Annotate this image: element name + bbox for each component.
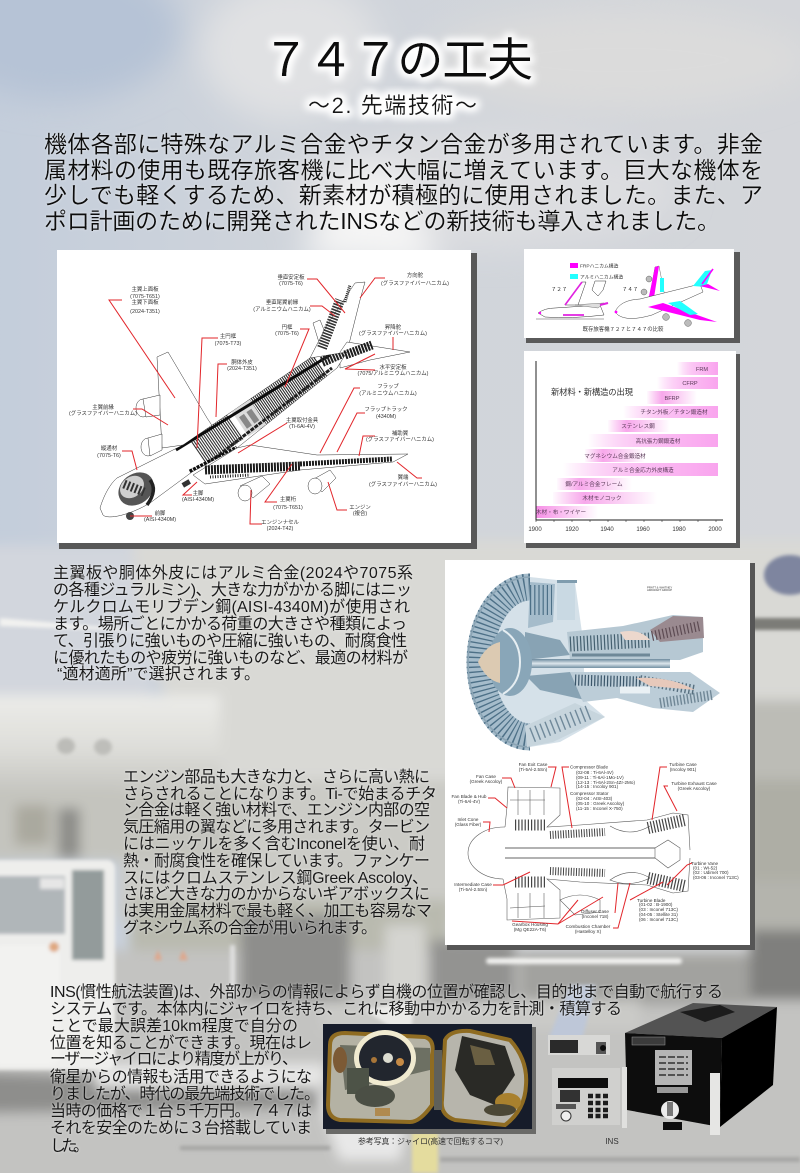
engine part labels: Diffuser Case (581, 909, 609, 914)
axes and year labels: 2000 (708, 527, 722, 533)
engine part labels: (Incoloy 901) (670, 767, 697, 772)
timeline bars: チタン外板／チタン鍛造材 (640, 408, 708, 416)
material callout labels: (グラスファイバーハニカム) (369, 480, 437, 488)
engine part labels: (02-04 : AISI-403) (576, 796, 613, 801)
engine part labels: Turbine Vane (691, 861, 719, 866)
paragraph: inertial navigation system (50, 983, 723, 1155)
axes and year labels: 1900 (528, 527, 542, 533)
material callout labels: 主翼取付金具 (286, 416, 319, 424)
engine part labels: Fan Case (476, 774, 496, 779)
timeline bars: FRM (696, 367, 708, 373)
photo: gyroscope reference picture (323, 1024, 536, 1134)
caption: INS photo: INS (605, 1137, 619, 1146)
material callout labels: (AISI-4340M) (144, 517, 176, 523)
engine part labels: (02 : Udimet 700) (693, 870, 729, 875)
fuselage interior structure (176, 352, 345, 472)
legend: アルミハニカム構造 (580, 274, 623, 280)
material callout labels: エンジン (349, 504, 371, 511)
material callout labels: 主翼下面板 (132, 298, 159, 306)
engine part labels: (05-10 : Greek Ascoloy) (576, 801, 625, 806)
engine part labels (452, 762, 739, 934)
left gyro housing (328, 1030, 433, 1122)
timeline bars: BFRP (665, 396, 680, 402)
engine part labels: Gearbox Housing (512, 922, 548, 927)
timeline bars: マグネシウム合金鍛造材 (584, 452, 646, 460)
material callout labels: 水平安定板 (380, 363, 407, 371)
axes and year labels: 1980 (672, 527, 686, 533)
material callout labels: 主翼桁 (280, 495, 297, 503)
material callout labels: 主円框 (220, 332, 237, 340)
paragraph: engine materials: にはニッケルを多く含むInconelを使い、耐 (123, 835, 425, 853)
timeline bars (536, 362, 718, 518)
material callout labels: (2024-T42) (267, 526, 294, 532)
panel: PW4000 turbofan cutaway and section (445, 560, 755, 950)
paragraph: inertial navigation system: りましたが、時代の最先端技術でした。 (50, 1085, 320, 1103)
material callout labels: 縦通材 (101, 444, 118, 452)
material callout labels: (グラスファイバーハニカム) (69, 409, 137, 417)
chart heading: 新材料・新構造の出現 (551, 387, 634, 397)
engine part labels: (Greek Ascoloy) (678, 786, 711, 791)
legend: FRPハニカム構造 (580, 262, 619, 270)
paragraph: engine materials (123, 768, 437, 937)
axes and year labels: 1960 (636, 527, 650, 533)
intro paragraph (44, 131, 763, 234)
engine part labels: (11-15 : Inconel X-750) (576, 806, 623, 811)
INS control display unit (552, 1068, 620, 1125)
engine part labels: (Ti-5Al-2.5Sn) (459, 887, 488, 892)
material callout labels: (2024-T351) (130, 309, 160, 315)
material callout labels: (4340M) (376, 414, 396, 420)
paragraph: inertial navigation system: ことで最大誤差10km程度で自分の (50, 1017, 298, 1035)
paragraph: engine materials: エンジン部品も大きな力と、さらに高い熱に (123, 768, 430, 786)
engine cross-section line drawing (468, 787, 690, 920)
paragraph: inertial navigation system: 衛星からの情報も活用できるようにな (50, 1068, 312, 1086)
material callout labels: (アルミニウムハニカム) (359, 389, 417, 397)
727 drawing (536, 281, 608, 319)
subtitle: ～2. 先端技術～ (308, 93, 477, 118)
material callout labels: (7075-T6) (97, 453, 121, 459)
engine part labels: (Mg QE22A-T6) (514, 927, 547, 932)
engine part labels: (09-11 : Ti-6Al-1Mo-1V) (576, 775, 624, 780)
material callout labels: (AISI-4340M) (182, 497, 214, 503)
747 drawing: ７４７ (622, 287, 638, 293)
cutaway airplane drawing (100, 282, 410, 520)
paragraph: inertial navigation system: ーザージャイロにより精度が上がり、 (50, 1050, 298, 1068)
material callout labels: (7075-T6) (275, 331, 299, 337)
engine part labels: (Ti-5Al-2.5Sn) (519, 767, 548, 772)
engine leader lines (483, 767, 692, 928)
engine part labels: (02-08 : Ti-6Al-4V) (576, 770, 614, 775)
material callout labels: 円框 (282, 323, 293, 331)
paragraph: alloys used in the airframe: に優れたものや疲労に強いものなど、最適の材料が (53, 649, 408, 667)
timeline bars: アルミ合金応力外皮構造 (612, 466, 674, 474)
paragraph: engine materials: さほど大きな力のかからないギアボックスに (123, 885, 430, 903)
paragraph: alloys used in the airframe: “適材適所”で選択されます。 (57, 665, 260, 683)
timeline bars: 木材モノコック (582, 494, 622, 502)
timeline bars: ステンレス鋼 (621, 422, 655, 430)
material callout labels: 前脚 (155, 509, 165, 517)
material callout labels: (グラスファイバーハニカム) (366, 435, 434, 443)
caption: gyro photo: 参考写真：ジャイロ(高速で回転するコマ) (358, 1136, 503, 1146)
title: ７４７の工夫 (263, 34, 533, 86)
material callout labels: 主脚 (193, 489, 203, 497)
material callout labels: 昇降舵 (385, 323, 402, 331)
engine part labels: (Greek Ascoloy) (470, 779, 503, 784)
callout leader lines (109, 278, 422, 524)
engine cutaway illustration: AIRCRAFT GROUP (647, 588, 672, 592)
paragraph: engine materials: さらされることになります。Ti-で始まるチタ (123, 785, 437, 803)
paragraph: engine materials: グネシウム系の合金が用いられます。 (123, 919, 377, 937)
engine cutaway illustration: PRATT & WHITNEY (647, 586, 672, 590)
engine part labels: (Ti-6Al-4V) (458, 799, 480, 804)
axes and year labels: 1920 (565, 527, 579, 533)
material callout labels: (7075/アルミニウムハニカム) (358, 369, 429, 377)
panel: new materials timeline chart (524, 351, 740, 548)
paragraph: alloys used in the airframe: ます。場所ごとにかかる荷重の大きさや種類によっ (53, 615, 407, 633)
INS hardware photo (548, 1003, 777, 1135)
engine part labels: Turbine Case (669, 762, 697, 767)
engine part labels: Turbine Blade (637, 898, 666, 903)
material callout labels: (7075-T73) (215, 341, 242, 347)
INS mode selector panel (548, 1035, 610, 1055)
paragraph: inertial navigation system: 当時の価格で１台５千万円。７４７は (50, 1102, 312, 1120)
paragraph: inertial navigation system: した。 (50, 1137, 89, 1155)
intro paragraph: 属材料の使用も既存旅客機に比べ大幅に増えています。巨大な機体を (44, 157, 763, 183)
engine part labels: (03-06 : Inconel 713C) (693, 875, 739, 880)
timeline bars: 鋼/アルミ合金フレーム (565, 480, 623, 488)
engine part labels: (01-02 : B-1900) (639, 902, 673, 907)
material callout labels: 胴体外皮 (231, 358, 253, 366)
timeline bars: 高抗張力鋼鍛造材 (636, 437, 681, 445)
legend (570, 262, 623, 280)
material callout labels: (7075-T6) (279, 281, 303, 287)
paragraph: alloys used in the airframe: 主翼板や胴体外皮にはアルミ合金(2024や7075系 (53, 564, 413, 582)
material callout labels (69, 271, 449, 532)
material callout labels: (2024-T351) (227, 366, 257, 372)
timeline bars: 木材・布・ワイヤー (536, 508, 586, 516)
intro paragraph: ポロ計画のために開発されたINSなどの新技術も導入されました。 (44, 208, 720, 234)
material callout labels: (7075-T651) (130, 294, 160, 300)
material callout labels: 翼端 (398, 473, 409, 481)
engine cutaway illustration (468, 577, 720, 747)
paragraph: engine materials: は実用金属材料で最も軽く、加工も容易なマ (123, 902, 432, 920)
engine part labels: (Hastelloy X) (575, 929, 602, 934)
material callout labels: (Ti-6Al-4V) (289, 424, 315, 430)
material callout labels: 垂直安定板 (278, 273, 305, 281)
engine part labels: (06 : Inconel 713C) (639, 917, 679, 922)
paragraph: engine materials: スにはクロムステンレス鋼Greek Ascoloy、 (123, 869, 428, 887)
timeline bars: CFRP (682, 381, 698, 387)
panel: 747 cutaway structure diagram (57, 250, 477, 549)
paragraph: alloys used in the airframe: て、引張りに強いものや圧縮に強いもの、耐腐食性 (53, 632, 407, 650)
engine part labels: Inlet Cone (458, 817, 479, 822)
engine part labels: Compressor Stator (570, 791, 609, 796)
747 drawing (615, 266, 720, 326)
material callout labels: 方向舵 (407, 271, 424, 279)
paragraph: alloys used in the airframe: ケルクロムモリブデン鋼(AISI-4340M)が使用され (53, 597, 410, 616)
material callout labels: (複合) (353, 509, 367, 517)
material callout labels: フラップ (377, 383, 399, 390)
paragraph: inertial navigation system: システムです。本体内にジャイロを持ち、これに移動中かかる力を計測・積算する (50, 999, 622, 1018)
engine part labels: (14-15 : Incoloy 901) (576, 784, 619, 789)
material callout labels: 主翼上面板 (132, 285, 159, 293)
material callout labels: (グラスファイバーハニカム) (381, 279, 449, 287)
material callout labels: 主翼前縁 (92, 403, 114, 411)
panel: 727 and 747 composite comparison (524, 249, 740, 343)
axes and year labels (528, 361, 723, 533)
material callout labels: (グラスファイバーハニカム) (359, 329, 427, 337)
engine part labels: (Inconel 718) (582, 914, 609, 919)
engine part labels: (12-13 : Ti-6Al-2Sn-4Zr-2Mo) (576, 780, 635, 785)
material callout labels: 垂直尾翼前縁 (266, 298, 299, 306)
paragraph: inertial navigation system: INS(慣性航法装置)は、外部からの情報によらず自機の位置が確認し、目的地まで自動で航行する (50, 983, 723, 1001)
engine part labels: (03 : Inconel 713C) (639, 907, 679, 912)
axes and year labels: 1940 (600, 527, 614, 533)
engine part labels: Fan Blade & Hub (452, 794, 487, 799)
727 drawing: ７２７ (551, 287, 567, 293)
engine part labels: Turbine Exhaust Case (671, 781, 717, 786)
engine part labels: Fan Exit Case (519, 762, 548, 767)
caption: 既存旅客機７２７と７４７の比較 (583, 325, 664, 333)
paragraph: engine materials: 気圧縮用の翼などに多用されます。タービン (123, 818, 430, 836)
material callout labels: フラップトラック (364, 406, 408, 413)
paragraph: alloys used in the airframe: の各種ジュラルミン)、大きな力がかかる脚にはニッ (53, 581, 412, 599)
engine part labels: Intermediate Case (454, 882, 492, 887)
paragraph: inertial navigation system: 位置を知ることができます。現在はレ (50, 1034, 312, 1052)
intro paragraph: 少しでも軽くするため、新素材が積極的に使用されました。また、ア (44, 182, 763, 208)
engine part labels: (04-05 : Stellite 31) (639, 912, 678, 917)
engine part labels: (Glass Fiber) (455, 822, 482, 827)
engine part labels: Compressor Blade (570, 764, 608, 770)
paragraph: inertial navigation system: それを安全のために３台搭載していま (50, 1119, 312, 1137)
material callout labels: エンジンナセル (261, 519, 299, 526)
engine part labels: (01 : WI-52) (693, 866, 718, 870)
material callout labels: (アルミニウムハニカム) (253, 305, 311, 313)
engine part labels: Combustion Chamber (566, 924, 611, 929)
paragraph: engine materials: 熱・耐腐食性を確保しています。ファンケー (123, 852, 430, 870)
material callout labels: 補助翼 (392, 429, 409, 437)
INS main unit box (622, 1003, 777, 1135)
material callout labels: (7075-T651) (273, 505, 303, 511)
paragraph: engine materials: ン合金は軽く強い材料で、エンジン内部の空 (123, 801, 430, 819)
paragraph: alloys used in the airframe (53, 564, 413, 683)
right gyro housing (434, 1031, 526, 1125)
intro paragraph: 機体各部に特殊なアルミ合金やチタン合金が多用されています。非金 (44, 131, 763, 157)
